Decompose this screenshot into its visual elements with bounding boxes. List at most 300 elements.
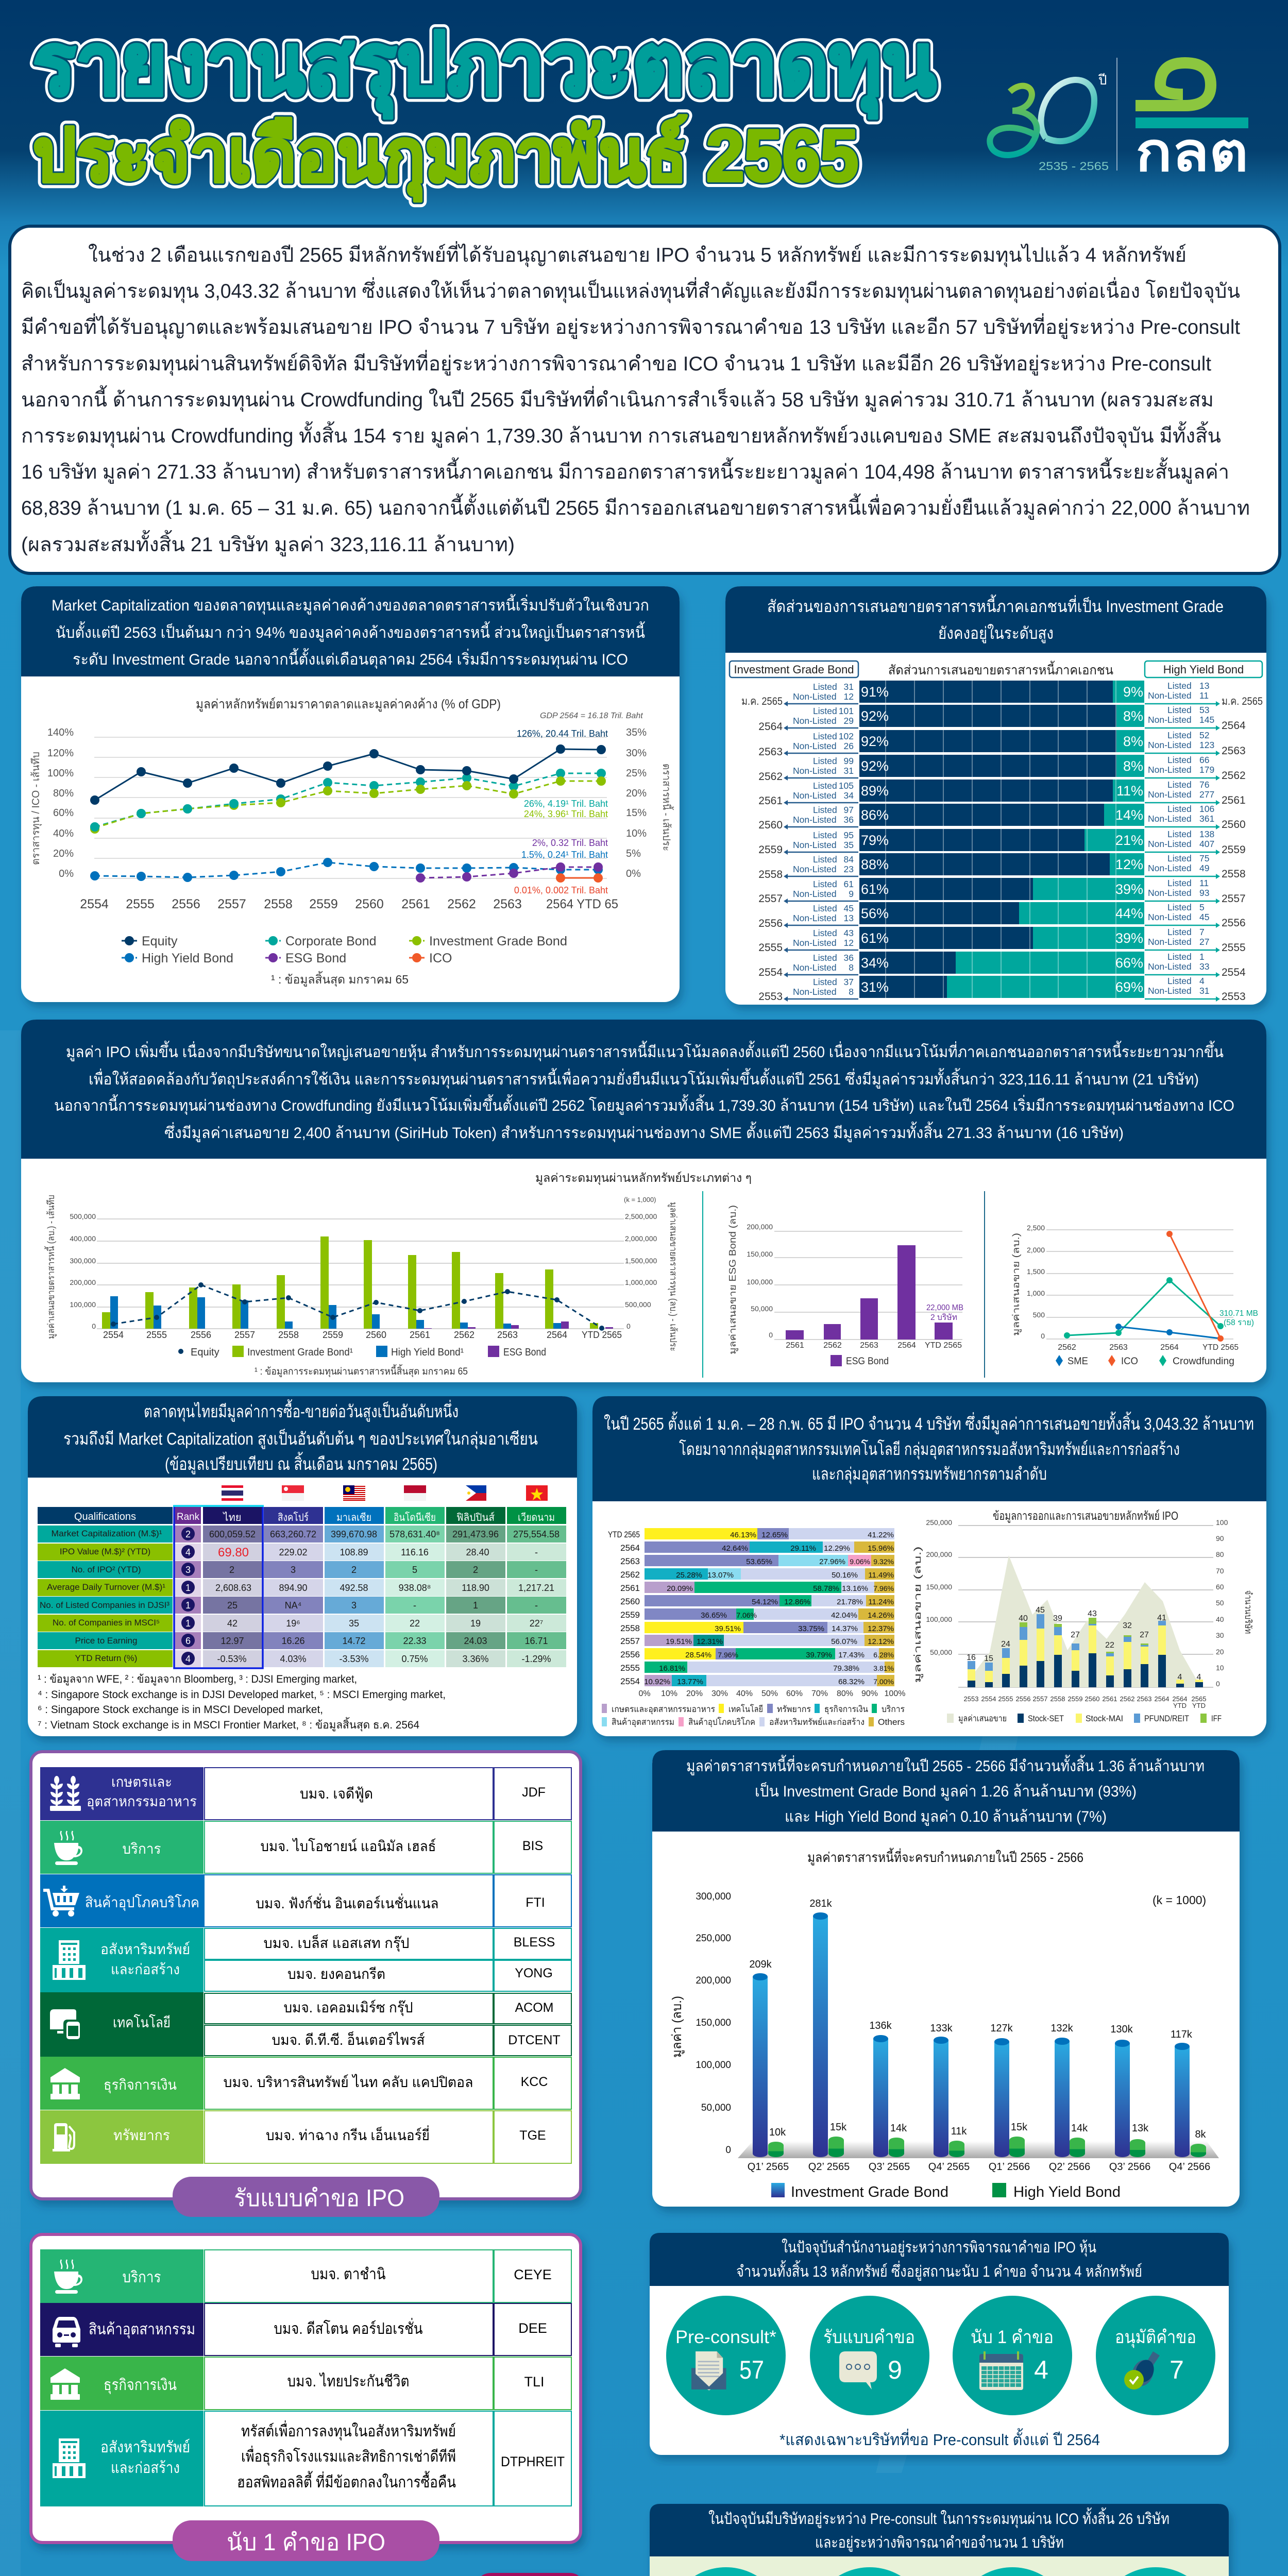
legend box: Investment Grade Bond: Investment Grade Bond <box>734 663 854 676</box>
row: DJSI <box>38 1597 566 1614</box>
value labels: 8k <box>1195 2129 1207 2140</box>
chart title: มูลค่าตราสารหนี้ที่จะครบกำหนดภายในปี 2565 - 2566 <box>807 1848 1083 1866</box>
row: industrial: สินค้าอุตสาหกรรม <box>89 2321 195 2339</box>
row: No. of IPO: 5 <box>412 1565 417 1575</box>
row: technology: บมจ. ดี.ที.ซี. อ็นเตอร์ไพรส์ <box>272 2031 425 2048</box>
row: 2560: Listed <box>813 805 837 815</box>
row: resources: บมจ. ท่าฉาง กรีน เอ็นเนอร์ยี่ <box>266 2125 430 2143</box>
row: 2556: Listed <box>1167 902 1192 912</box>
line: Crowdfunding <box>1064 1277 1224 1338</box>
text: summary paragraph: การระดมทุนผ่าน Crowdfunding ทั้งสิ้น 154 ราย มูลค่า 1,739.30 ล้านบาท การเสนอขายหลักทรัพย์วงแคบของ SME สะสมจนถึงปัจจุบัน มีทั้งสิ้น <box>21 421 1221 448</box>
x axis labels: 2563 <box>497 1330 518 1340</box>
legend <box>771 2183 1121 2200</box>
row: 2557: 2557 <box>620 1636 640 1646</box>
left axis labels: 200,000 <box>70 1278 96 1286</box>
row: 2564 <box>620 1541 894 1553</box>
legend: สินค้าอุตสาหกรรม <box>612 1717 674 1727</box>
row: 2563: 27.96% <box>819 1557 845 1566</box>
value labels: 136k <box>869 2020 892 2031</box>
row: consumer <box>40 1874 571 1927</box>
heading: รวมถึงมี Market Capitalization สูงเป็นอันดับต้น ๆ ของประเทศในกลุ่มอาเซียน <box>63 1429 538 1449</box>
row: 2559: 2559 <box>1222 844 1246 856</box>
row: 2557: Non-Listed <box>1148 888 1192 898</box>
x axis labels: 50% <box>761 1689 778 1698</box>
value labels: 15 <box>984 1654 993 1663</box>
row: Price to Earning: 16.71 <box>524 1636 548 1646</box>
row: Average Daily Turnover: 118.90 <box>462 1583 489 1593</box>
row: 2561: 76 <box>1199 779 1209 790</box>
series: Equity <box>90 744 606 805</box>
row: 2556: 44% <box>1115 906 1143 921</box>
axis labels: 1,000 <box>1027 1289 1045 1297</box>
row: 2558: Listed <box>813 854 837 865</box>
row: 2563: 2563 <box>620 1556 640 1566</box>
row: No. of IPO <box>38 1561 566 1578</box>
right axis labels: 90 <box>1216 1534 1224 1543</box>
x axis labels: YTD 2565 <box>925 1341 962 1350</box>
heading: จำนวนทั้งสิ้น 13 หลักทรัพย์ ซึ่งอยู่สถานะนับ 1 คำขอ จำนวน 4 หลักทรัพย์ <box>736 2260 1142 2281</box>
highlight: Thailand column <box>173 1506 264 1668</box>
data labels <box>514 728 608 895</box>
stat: Pre-consult 57 <box>666 2296 786 2415</box>
row: 2557: 61% <box>861 882 889 897</box>
right axis labels: 50 <box>1216 1599 1224 1607</box>
row: MSCI: 19⁶ <box>286 1618 300 1629</box>
legend <box>602 1704 905 1727</box>
text: summary paragraph: คิดเป็นมูลค่าระดมทุน 3,043.32 ล้านบาท ซึ่งแสดงให้เห็นว่าตลาดทุนเป็นแหล่งทุนที่สำคัญและยังมีการระดมทุนผ่านตลาดทุนอย่างต่อเนื่อง โดยปัจจุบัน <box>21 277 1240 303</box>
row: 2557: 12.31% <box>697 1637 723 1646</box>
x axis labels: 2562 <box>1120 1695 1134 1703</box>
chart title: ข้อมูลการออกและการเสนอขายหลักทรัพย์ IPO <box>993 1509 1178 1523</box>
panel: IPO status <box>650 2233 1229 2455</box>
stat: received 9 <box>810 2296 929 2415</box>
row: services: บมจ. ตาชำนิ <box>311 2266 385 2283</box>
row: 2561: 105 <box>839 781 854 791</box>
x axis labels <box>748 2161 1210 2173</box>
text: summary paragraph: ในช่วง 2 เดือนแรกของปี 2565 มีหลักทรัพย์ที่ได้รับอนุญาตเสนอขาย IPO จำนวน 5 หลักทรัพย์ และมีการระดมทุนไปแล้ว 4 หลักทรัพย์ <box>88 241 1187 267</box>
row: 2557: 56.07% <box>831 1637 857 1646</box>
stat: filed 0 <box>953 2567 1072 2576</box>
row: Average Daily Turnover: 492.58 <box>340 1583 368 1593</box>
row: 2562: 2562 <box>758 771 783 783</box>
row: 2555: Listed <box>1167 927 1192 937</box>
axis title: มูลค่าเสนอขาย (ลบ.) <box>1011 1233 1022 1336</box>
row: 2556: 2556 <box>1222 917 1246 929</box>
row: services <box>40 2249 571 2303</box>
row: 2564: 12.29% <box>824 1544 850 1553</box>
value labels: 15k <box>1011 2122 1028 2133</box>
left axis labels: 20% <box>53 848 74 859</box>
row: ม.ค. 2565: ม.ค. 2565 <box>1222 696 1263 707</box>
row: 2554: Non-Listed <box>793 962 837 973</box>
value labels: 45 <box>1036 1606 1045 1615</box>
x axis labels <box>638 1689 905 1698</box>
x axis labels: 20% <box>686 1689 703 1698</box>
row: 2556: 45 <box>844 903 854 913</box>
text: summary paragraph: 16 บริษัท มูลค่า 271.33 ล้านบาท) สำหรับตราสารหนี้ภาคเอกชน มีการออกตราสารหนี้ระยะยาวมูลค่า 104,498 ล้านบาท ตราสารหนี้ระยะสั้นมูลค่า <box>21 457 1229 484</box>
value labels: 15k <box>830 2122 847 2133</box>
row: services: บริการ <box>123 1841 161 1857</box>
label pill <box>173 2177 439 2217</box>
annotation <box>926 1303 963 1322</box>
row: YTD 2565: YTD 2565 <box>608 1530 640 1539</box>
left axis labels: 500,000 <box>70 1212 96 1221</box>
row: 2564: 2564 <box>758 721 783 733</box>
label pill: นับ 1 คำขอ IPO <box>227 2529 385 2555</box>
x axis labels: 2561 <box>401 897 430 911</box>
row: 2561: 89% <box>861 783 889 799</box>
stat: approved 7: อนุมัติคำขอ <box>1115 2327 1196 2348</box>
footnotes: ¹ : ข้อมูลจาก WFE, ² : ข้อมูลจาก Bloomberg, ³ : DJSI Emerging market, <box>38 1673 357 1686</box>
heading: นับตั้งแต่ปี 2563 เป็นต้นมา กว่า 94% ของมูลค่าคงค้างของตราสารหนี้ ส่วนใหญ่เป็นตราสารหนี้ <box>56 621 645 642</box>
row: YTD 2565: 46.13% <box>730 1531 756 1539</box>
value labels: 127k <box>990 2023 1013 2034</box>
row: 2559: 2559 <box>620 1610 640 1620</box>
heading: นอกจากนี้การระดมทุนผ่านช่องทาง Crowdfunding ยังมีแนวโน้มเพิ่มขึ้นตั้งแต่ปี 2562 โดยมูลค่ารวมทั้งสิ้น 1,739.30 ล้านบาท (154 บริษัท) และในปี 2564 เริ่มมีการระดมทุนผ่านช่องทาง ICO <box>54 1094 1234 1115</box>
bars <box>786 1245 953 1340</box>
left axis title: มูลค่าเสนอขาย (ลบ.) <box>912 1547 923 1683</box>
row: 2554: 7.00% <box>873 1677 894 1686</box>
row: 2559: 7.06% <box>736 1611 757 1619</box>
legend: Investment Grade Bond¹ <box>247 1347 353 1358</box>
row: 2561: 7.96% <box>873 1584 894 1592</box>
x axis labels: 2555 <box>126 897 155 911</box>
left axis labels: 200,000 <box>926 1550 952 1558</box>
left axis labels: 60% <box>53 807 74 819</box>
row: YTD Return: 3.36% <box>462 1654 489 1664</box>
table header <box>38 1507 566 1524</box>
row: agriculture: เกษตรและ <box>111 1774 172 1790</box>
legend: ICO <box>429 951 452 965</box>
row: ม.ค. 2565: 9% <box>1123 684 1143 700</box>
value labels: 133k <box>930 2023 953 2034</box>
row: 2563: 102 <box>839 731 854 741</box>
right axis labels: 20 <box>1216 1648 1224 1656</box>
x axis labels: 2561 <box>1103 1695 1117 1703</box>
row: YTD Return <box>38 1650 566 1667</box>
left axis labels: 50,000 <box>930 1648 952 1656</box>
row: Price to Earning: 22.33 <box>403 1636 427 1646</box>
unit note: (k = 1000) <box>1153 1893 1206 1907</box>
x axis labels: 2560 <box>1085 1695 1099 1703</box>
footnote: ¹ : ข้อมูลสิ้นสุด มกราคม 65 <box>271 971 409 987</box>
heading <box>652 1750 1240 1832</box>
row: 2559: Listed <box>1167 829 1192 839</box>
left axis labels: 140% <box>47 727 74 738</box>
row: services: CEYE <box>514 2267 552 2282</box>
row: 2561: 20.09% <box>667 1584 693 1593</box>
axis labels: 100,000 <box>747 1278 773 1286</box>
row: IPO Value: 108.89 <box>340 1547 368 1557</box>
row: 2557: Listed <box>813 879 837 889</box>
row: 2556: 6.28% <box>873 1651 894 1659</box>
row: 2563: 92% <box>861 734 889 749</box>
right axis labels: 10% <box>626 828 647 839</box>
row: MSCI: 35 <box>349 1618 359 1629</box>
row: 2558: 2558 <box>758 869 783 880</box>
panel: summary <box>10 226 1280 573</box>
row: YTD Return: 4.03% <box>280 1654 307 1664</box>
cylinders: High Yield Bond <box>768 2137 1206 2157</box>
row: 2561: Non-Listed <box>1148 789 1192 800</box>
row: ม.ค. 2565: 31 <box>844 682 854 692</box>
right axis labels: 1,500,000 <box>625 1257 657 1265</box>
right axis labels: 80 <box>1216 1550 1224 1558</box>
row: 2564 <box>758 705 1246 733</box>
row: 2558: 12% <box>1115 857 1143 872</box>
row: 2554: 34% <box>861 955 889 971</box>
row: 2560: 36 <box>844 815 854 825</box>
table rows <box>40 1767 571 2164</box>
heading: มูลค่า IPO เพิ่มขึ้น เนื่องจากมีบริษัทขนาดใหญ่เสนอขายหุ้น สำหรับการระดมทุนผ่านตราสารหนี้มีแนวโน้มลดลงตั้งแต่ปี 2560 เนื่องจากมีแนวโน้มที่ภาคเอกชนออกตราสารหนี้ระยะยาวมากขึ้น <box>66 1041 1224 1062</box>
x axis labels: 2564 <box>1155 1695 1169 1703</box>
row: 2559: 35 <box>844 840 854 850</box>
row: 2559: 42.04% <box>831 1611 857 1620</box>
annotation: 310.71 MB <box>1219 1309 1258 1318</box>
row: resources: TGE <box>519 2128 546 2143</box>
heading: สัดส่วนของการเสนอขายตราสารหนี้ภาคเอกชนที่เป็น Investment Grade <box>767 595 1224 616</box>
row: 2557: 19.51% <box>666 1637 692 1646</box>
row: property: YONG <box>515 1966 553 1980</box>
right axis labels: 0% <box>626 868 641 879</box>
row: 2559 <box>620 1608 894 1620</box>
chart title: มูลค่าหลักทรัพย์ตามราคาตลาดและมูลค่าคงค้าง (% of GDP) <box>196 697 501 712</box>
row: 2560: 11.24% <box>868 1598 894 1606</box>
left axis labels: 400,000 <box>70 1234 96 1243</box>
row: 2562: 2562 <box>620 1570 640 1580</box>
row: property: ฮอสพิทอลลิตี้ ที่มีข้อตกลงในการซื้อคืน <box>237 2471 456 2491</box>
label pill: รับแบบคำขอ IPO <box>234 2184 404 2211</box>
x axis labels: 2562 <box>447 897 476 911</box>
right axis labels: 35% <box>626 727 647 738</box>
row: 2553: Non-Listed <box>793 987 837 997</box>
series: Investment Grade Bond <box>90 776 606 834</box>
legend: ESG Bond <box>846 1356 889 1367</box>
row: 2555: 39% <box>1115 930 1143 946</box>
row: 2553: 69% <box>1115 979 1143 995</box>
row: 2558: Non-Listed <box>1148 863 1192 873</box>
panel: market capitalization <box>21 586 680 1002</box>
axis title: มูลค่าเสนอขาย ESG Bond (ลบ.) <box>727 1205 738 1354</box>
row: 2562: Non-Listed <box>1148 765 1192 775</box>
row: 2555: 43 <box>844 928 854 938</box>
row: 2564: Non-Listed <box>1148 715 1192 725</box>
cylinders: Investment Grade Bond <box>753 1912 1190 2157</box>
table: comparison <box>38 1507 566 1667</box>
row: 2562: 99 <box>844 756 854 766</box>
row: 2562: Listed <box>1167 755 1192 765</box>
x axis labels: 2564 <box>897 1341 916 1350</box>
left axis labels <box>47 727 74 879</box>
row: 2560: Listed <box>1167 804 1192 814</box>
bars: Stock-SET <box>968 1653 1203 1687</box>
annotation: 2 บริษัท <box>930 1313 957 1322</box>
x axis labels: 0% <box>638 1689 651 1698</box>
table header: Qualifications <box>74 1511 136 1522</box>
left axis labels <box>70 1212 96 1330</box>
row: 2559 <box>758 829 1246 856</box>
footnotes: ⁶ : Singapore Stock exchange is in MSCI Developed market, <box>38 1704 323 1716</box>
axis title: มูลค่า (ลบ.) <box>670 1996 685 2058</box>
row: 2559: Non-Listed <box>793 840 837 850</box>
row: 2562: Listed <box>813 756 837 766</box>
row: 2564: 145 <box>1199 715 1214 725</box>
row: 2557: 2557 <box>1222 893 1246 905</box>
row: No. of IPO: No. of IPO² (YTD) <box>71 1565 141 1574</box>
row: Market Capitalization: 291,473.96 <box>452 1529 499 1539</box>
legend: SME <box>1067 1356 1088 1367</box>
annotation: 22,000 MB <box>926 1303 963 1312</box>
row: 2556: 2556 <box>758 918 783 929</box>
x axis labels: 2563 <box>860 1341 878 1350</box>
right axis title: ตราสารหนี้ - เส้นประ <box>660 764 674 851</box>
legend: สินค้าอุปโภคบริโภค <box>688 1717 755 1727</box>
row: MSCI: 22 <box>410 1618 420 1629</box>
series: ESG Bond <box>416 862 603 883</box>
value labels: 32 <box>1123 1621 1132 1630</box>
x axis labels: YTD 2565 <box>582 1330 622 1340</box>
note: GDP: GDP 2564 = 16.18 Tril. Baht <box>540 711 643 720</box>
left axis labels: 0 <box>92 1322 96 1330</box>
footnotes <box>38 1673 446 1732</box>
row: 2561: Non-Listed <box>793 790 837 801</box>
row: 2554: Non-Listed <box>1148 961 1192 972</box>
value labels: 27 <box>1071 1631 1080 1639</box>
line: ICO <box>1166 1231 1224 1342</box>
row: IPO Value: - <box>535 1547 538 1557</box>
row: 2560: Non-Listed <box>1148 814 1192 824</box>
row: technology: DTCENT <box>508 2033 561 2047</box>
row: 2555: 61% <box>861 930 889 946</box>
row: DJSI: NA⁴ <box>285 1600 301 1611</box>
row: 2553: Listed <box>1167 976 1192 986</box>
x axis labels: Q1’ 2566 <box>989 2161 1030 2173</box>
legend: PFUND/REIT <box>1144 1714 1189 1723</box>
row: 2562 <box>758 755 1246 783</box>
x axis labels: 30% <box>711 1689 728 1698</box>
row: finance: ธุรกิจการเงิน <box>104 2377 177 2395</box>
row: Market Capitalization <box>38 1526 566 1543</box>
panel: ICO status <box>650 2504 1229 2576</box>
legend <box>947 1714 1222 1724</box>
line: Equity <box>111 1282 604 1331</box>
row: 2563: 2563 <box>758 746 783 758</box>
value labels: 16 <box>967 1653 976 1662</box>
annotation <box>1219 1309 1258 1327</box>
value labels: 4 <box>1178 1673 1182 1682</box>
row: services: บริการ <box>123 2269 161 2286</box>
right axis labels: 60 <box>1216 1583 1224 1591</box>
row: 2560: 106 <box>1199 804 1214 814</box>
legend: ESG Bond <box>285 951 346 965</box>
row: 2553: 2553 <box>1222 991 1246 1003</box>
chart: IPO issuance <box>912 1509 1253 1724</box>
row: 2561 <box>620 1582 894 1593</box>
row: DJSI: - <box>535 1600 538 1611</box>
legend: เทคโนโลยี <box>728 1704 763 1714</box>
row: 2559: 138 <box>1199 829 1214 839</box>
icon: 30 anniversary mark <box>990 80 1094 155</box>
row: finance: บมจ. บริหารสินทรัพย์ ไนท คลับ แคปปิตอล <box>224 2074 473 2090</box>
row: No. of IPO: - <box>535 1565 538 1575</box>
row: 2555: 12 <box>844 938 854 948</box>
row: industrial <box>40 2303 571 2356</box>
row: 2564: Non-Listed <box>793 716 837 726</box>
row: 2557 <box>620 1635 894 1646</box>
y axis labels: 50,000 <box>701 2103 731 2113</box>
x axis labels: 2557 <box>217 897 246 911</box>
heading <box>650 2504 1229 2556</box>
row: 2555: Non-Listed <box>793 938 837 948</box>
x axis labels: 90% <box>861 1689 878 1698</box>
row: 2560: 21.78% <box>837 1598 863 1606</box>
row: 2556 <box>620 1648 894 1659</box>
left axis labels: 100,000 <box>70 1300 96 1309</box>
x axis labels <box>786 1341 962 1350</box>
stat: filed 4 <box>953 2296 1072 2415</box>
row: 2556: 39.79% <box>806 1651 832 1659</box>
row: ม.ค. 2565: Listed <box>1167 681 1192 691</box>
row: agriculture <box>40 1767 571 1820</box>
right axis labels: 5% <box>626 848 641 859</box>
row: 2560: 97 <box>844 805 854 815</box>
row: 2564: Listed <box>813 706 837 716</box>
heading: ตลาดทุนไทยมีมูลค่าการซื้อ-ขายต่อวันสูงเป็นอันดับหนึ่ง <box>144 1399 459 1422</box>
row: 2562: 179 <box>1199 765 1214 775</box>
x axis labels: 2560 <box>366 1330 386 1340</box>
x axis labels: 2561 <box>786 1341 804 1350</box>
title line 1: รายงานสรุปภาวะตลาดทุน <box>33 16 936 118</box>
row: 2564: 101 <box>839 706 854 716</box>
row: IPO Value <box>38 1544 566 1561</box>
heading: เพื่อให้สอดคล้องกับวัตถุประสงค์การใช้เงิน และการระดมทุนผ่านตราสารหนี้เพื่อความยั่งยืนมีแนวโน้มเพิ่มขึ้นตั้งแต่ปี 2561 ซึ่งมีมูลค่ารวมทั้งสิ้นกว่า 323,116.11 ล้านบาท (21 บริษัท) <box>89 1068 1199 1089</box>
row: property: อสังหาริมทรัพย์ <box>100 2438 190 2456</box>
row: 2563: 26 <box>844 741 854 751</box>
row: 2557: 2557 <box>758 893 783 905</box>
title line 2: ประจำเดือนกุมภาพันธ์ 2565 <box>33 115 858 201</box>
row: 2557: 9 <box>849 889 854 899</box>
value labels: 13k <box>1132 2123 1149 2134</box>
right axis labels: 25% <box>626 768 647 779</box>
row: 2555: 79.38% <box>833 1664 859 1673</box>
icon: SEC mark <box>1136 63 1248 128</box>
row: technology: ACOM <box>515 2001 553 2015</box>
text: summary paragraph: นอกจากนี้ ด้านการระดมทุนผ่าน Crowdfunding ในปี 2565 มีบริษัทที่ดำเนินการสำเร็จแล้ว 58 บริษัท มูลค่ารวม 310.71 ล้านบาท (ผลรวมสะสม <box>21 385 1214 412</box>
chart title: มูลค่าระดมทุนผ่านหลักทรัพย์ประเภทต่าง ๆ <box>535 1171 752 1185</box>
row: 2558 <box>620 1622 894 1633</box>
row: Average Daily Turnover: 938.08⁸ <box>399 1583 431 1593</box>
legend: ทรัพยากร <box>777 1704 811 1714</box>
row: 2553: 37 <box>844 977 854 987</box>
legend box: High Yield Bond <box>1145 661 1262 677</box>
legend: Corporate Bond <box>285 934 377 948</box>
left axis labels: 100,000 <box>926 1615 952 1623</box>
axis labels: 2,500 <box>1027 1224 1045 1232</box>
stat: approved 7: 7 <box>1170 2355 1184 2384</box>
value labels: 4 <box>1197 1673 1201 1682</box>
row: 2557: 61 <box>844 879 854 889</box>
legend: Investment Grade Bond <box>429 934 567 948</box>
row: 2561: 2561 <box>758 795 783 807</box>
text: year: ปี <box>1098 72 1107 88</box>
row: 2560: 14% <box>1115 807 1143 823</box>
row: MSCI: 42 <box>227 1618 238 1629</box>
row: 2555: 7 <box>1199 927 1205 937</box>
heading: ยังคงอยู่ในระดับสูง <box>938 624 1054 643</box>
row: agriculture: อุตสาหกรรมอาหาร <box>87 1793 197 1810</box>
row: Price to Earning: 12.97 <box>221 1636 244 1646</box>
text: summary paragraph: มีคำขอที่ได้รับอนุญาตและพร้อมเสนอขาย IPO จำนวน 7 บริษัท อยู่ระหว่างการพิจารณาคำขอ 13 บริษัท และอีก 57 บริษัทที่อยู่ระหว่าง Pre-consult <box>21 313 1240 340</box>
